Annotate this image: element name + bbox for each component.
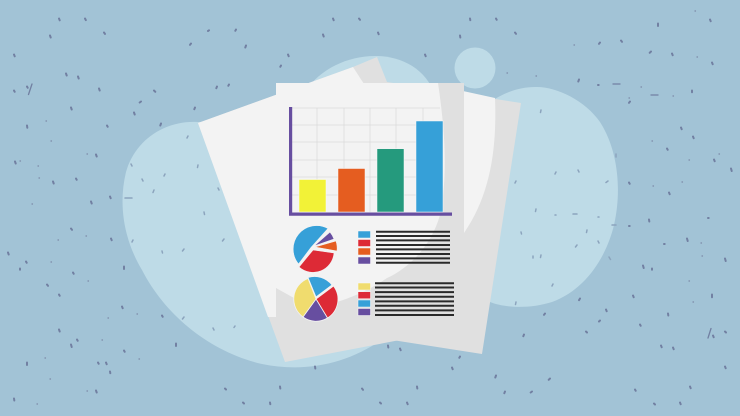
paper highlight: left sheet bbox=[198, 67, 364, 317]
pie chart: bottom bbox=[294, 276, 338, 321]
blob: large left bbox=[123, 120, 400, 367]
bar: green bbox=[377, 149, 404, 212]
slice: orange bbox=[315, 241, 337, 251]
slice: blue bbox=[308, 276, 332, 297]
chart grid bbox=[292, 108, 440, 212]
slice: purple bbox=[303, 299, 328, 321]
slice: blue bbox=[293, 226, 328, 264]
paper highlight: front sheet bbox=[276, 83, 445, 305]
circle: small top right bbox=[454, 48, 496, 88]
swatches bbox=[358, 231, 370, 264]
bar: yellow bbox=[299, 180, 326, 212]
paper: front sheet bbox=[276, 83, 464, 335]
slice: red bbox=[316, 286, 338, 318]
slice: yellow bbox=[294, 278, 316, 317]
legend: top bbox=[358, 231, 450, 264]
speckles: thin marks bbox=[28, 84, 711, 338]
text lines bbox=[376, 232, 450, 263]
speckles: right side and centre bbox=[208, 18, 732, 404]
paper: left tilted sheet bbox=[198, 57, 400, 362]
text lines bbox=[375, 283, 454, 315]
pie chart: top bbox=[293, 226, 337, 272]
bar: orange bbox=[338, 168, 365, 212]
chart axes bbox=[289, 107, 452, 216]
bar chart bbox=[289, 107, 452, 216]
swatches bbox=[358, 283, 370, 316]
slice: red bbox=[299, 250, 334, 272]
speckles: outer background bbox=[8, 18, 195, 400]
blob: right bbox=[490, 87, 618, 307]
blob: top behind papers bbox=[305, 56, 436, 100]
legend: bottom bbox=[358, 283, 454, 316]
paper: right back sheet bbox=[360, 82, 521, 354]
slice: purple bbox=[314, 232, 334, 246]
bar: blue bbox=[416, 121, 443, 212]
paper highlight: right sheet bbox=[440, 86, 495, 240]
speckles: on blobs bbox=[125, 110, 616, 330]
